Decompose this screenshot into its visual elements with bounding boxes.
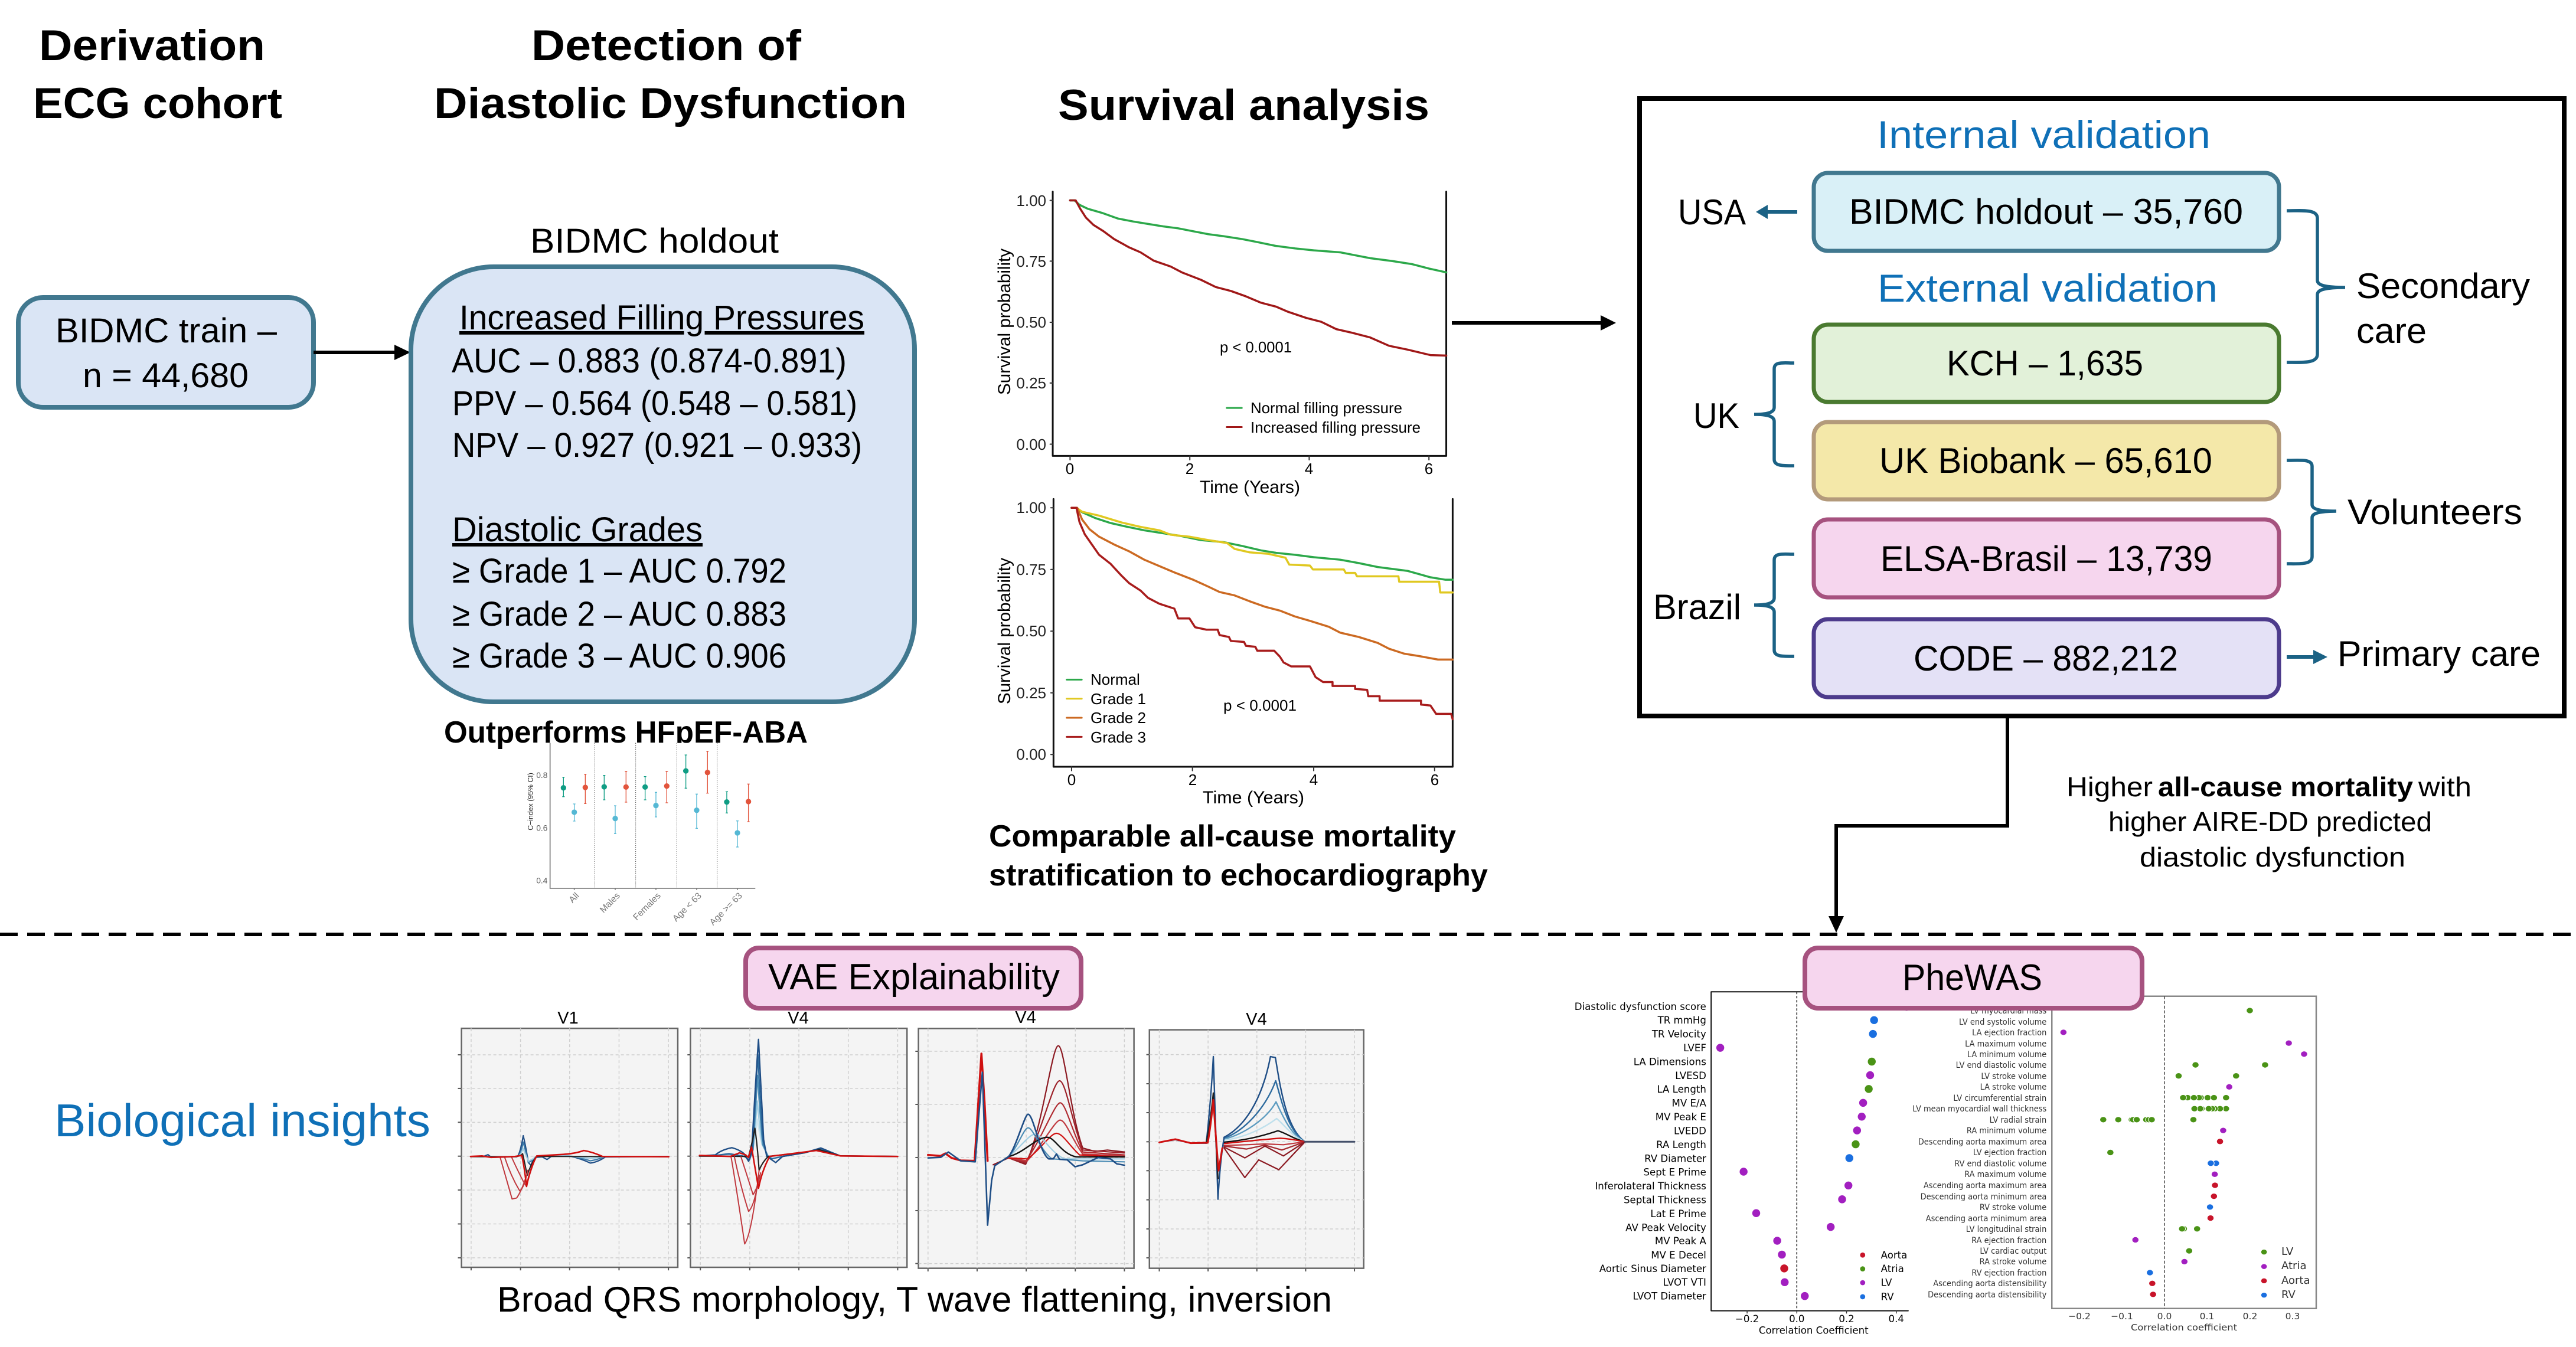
label: Secondary care with brace: care (2356, 311, 2427, 351)
label: USA with arrow: USA (1678, 192, 1746, 232)
subheading: Increased Filling Pressures: Increased Filling Pressures (459, 299, 864, 337)
caption: Outperforms HFpEF-ABA: Outperforms HFpEF-ABA (444, 715, 808, 750)
box: BIDMC train: BIDMC train – (55, 312, 277, 350)
chart: echo PheWAS: LVEDD (1674, 1125, 1706, 1136)
chart: survival by filling pressure: 0.50 (1016, 313, 1046, 331)
chart: echo PheWAS: RV (1881, 1291, 1894, 1302)
chart: survival by filling pressure: 1.00 (1016, 192, 1046, 210)
y labels: Descending aorta minimum area (1921, 1192, 2046, 1202)
chart: C-index comparison (525, 743, 762, 932)
chart: echo PheWAS: 0.0 (1789, 1313, 1805, 1325)
label: Secondary care with brace (2287, 211, 2530, 362)
y labels: LV mean myocardial wall thickness (1912, 1104, 2046, 1114)
chart: survival by filling pressure: Survival probability (995, 249, 1014, 395)
chart: CMR PheWAS: 0.2 (2243, 1311, 2257, 1322)
heading: Detection of Diastolic Dysfunction: Detection of (531, 22, 802, 70)
chart: ECG V4 T wave shift: V4 (1015, 1008, 1036, 1027)
chart: C-index comparison: 0.6 (536, 823, 547, 832)
label: Brazil with brace (1653, 554, 1794, 656)
y labels: LV circumferential strain (1953, 1093, 2046, 1103)
caption: comparable mortality stratification (989, 819, 1488, 892)
caption: comparable mortality stratification: Comparable all-cause mortality (989, 819, 1456, 854)
y labels: LV end diastolic volume (1956, 1060, 2046, 1070)
y labels: LV ejection fraction (1973, 1147, 2046, 1158)
chart: survival by filling pressure: Increased filling pressure (1251, 419, 1421, 436)
label: Volunteers with brace (2287, 460, 2522, 564)
chart: survival by diastolic grade: 6 (1431, 771, 1439, 789)
heading: Derivation ECG cohort: ECG cohort (33, 80, 282, 127)
heading: Detection of Diastolic Dysfunction (434, 22, 907, 127)
chart: echo PheWAS: Correlation Coefficient (1759, 1325, 1869, 1336)
chart: survival by filling pressure: 0.75 (1016, 253, 1046, 270)
chart: ECG V4 T wave shift (915, 1008, 1134, 1271)
chart: survival by diastolic grade: Grade 1 (1091, 690, 1146, 708)
arrow: survival to validation (1452, 315, 1616, 331)
chart: C-index comparison: Females (631, 891, 663, 923)
chart: ECG V4 T wave inversion (1147, 1010, 1364, 1271)
box: ELSA-Brasil: ELSA-Brasil – 13,739 (1880, 539, 2212, 578)
heading: Derivation ECG cohort (33, 22, 282, 127)
label: Volunteers with brace: Volunteers (2348, 492, 2522, 532)
chart: C-index comparison: Age >= 63 (708, 891, 745, 927)
chart: echo PheWAS: Septal Thickness (1624, 1195, 1706, 1206)
chart: survival by diastolic grade: Time (Years) (1203, 788, 1304, 807)
box: VAE Explainability (746, 948, 1081, 1008)
chart: C-index comparison: Males (598, 891, 622, 915)
metric: PPV: PPV – 0.564 (0.548 – 0.581) (452, 384, 857, 423)
chart: echo PheWAS: MV Peak A (1655, 1235, 1707, 1247)
chart: echo PheWAS: Sept E Prime (1644, 1167, 1706, 1178)
chart: ECG V1: V1 (557, 1009, 579, 1028)
chart: echo PheWAS: 0.4 (1889, 1313, 1904, 1325)
chart: survival by filling pressure: 0.00 (1016, 436, 1046, 453)
caption: comparable mortality stratification: stratification to echocardiography (989, 858, 1488, 892)
box: BIDMC holdout: BIDMC holdout – 35,760 (1849, 192, 2243, 231)
chart: CMR PheWAS (1911, 995, 2324, 1338)
subheading: Diastolic Grades: Diastolic Grades (452, 511, 703, 549)
y labels: Ascending aorta distensibility (1933, 1279, 2046, 1289)
chart: survival by diastolic grade: Grade 2 (1091, 709, 1146, 727)
metric: grade 2: ≥ Grade 2 – AUC 0.883 (452, 595, 786, 633)
y labels: LA ejection fraction (1972, 1028, 2046, 1038)
metric: grade 3: ≥ Grade 3 – AUC 0.906 (452, 637, 786, 675)
box: BIDMC train (18, 297, 314, 407)
chart: C-index comparison: C−index (95% CI) (527, 773, 535, 831)
chart: echo PheWAS: LA Dimensions (1634, 1056, 1706, 1067)
heading: External validation: External validation (1878, 266, 2218, 310)
box: PheWAS: PheWAS (1902, 957, 2042, 998)
chart: ECG V1 (458, 1009, 678, 1270)
chart: survival by diastolic grade: p < 0.0001 (1223, 697, 1297, 714)
heading: Detection of Diastolic Dysfunction: Diastolic Dysfunction (434, 80, 907, 127)
y labels: Ascending aorta minimum area (1926, 1214, 2046, 1224)
chart: echo PheWAS: TR Velocity (1651, 1029, 1706, 1040)
y labels: Descending aorta distensibility (1928, 1290, 2046, 1300)
chart: echo PheWAS: Atria (1881, 1263, 1904, 1274)
box: BIDMC holdout (1814, 173, 2279, 251)
chart: survival by filling pressure (995, 192, 1447, 497)
panel: BIDMC holdout metrics (411, 267, 915, 702)
y labels: LV end systolic volume (1959, 1017, 2046, 1027)
y labels: Descending aorta maximum area (1918, 1137, 2046, 1147)
y labels: RA minimum volume (1967, 1126, 2046, 1136)
chart: C-index comparison: 0.4 (536, 877, 548, 885)
chart: ECG V4 T wave inversion: V4 (1246, 1010, 1267, 1029)
chart: survival by filling pressure: 0.25 (1016, 374, 1046, 392)
y labels: RV ejection fraction (1971, 1268, 2046, 1278)
heading: Survival analysis: Survival analysis (1058, 81, 1429, 129)
y labels: RA ejection fraction (1971, 1235, 2046, 1245)
box: ELSA-Brasil (1814, 519, 2279, 597)
box: UK Biobank: UK Biobank – 65,610 (1879, 441, 2212, 480)
chart: echo PheWAS: −0.2 (1735, 1313, 1759, 1325)
chart: CMR PheWAS: 0.0 (2157, 1311, 2172, 1322)
chart: survival by diastolic grade: Survival probability (995, 558, 1014, 704)
chart: survival by diastolic grade: 0.50 (1016, 622, 1046, 640)
chart: survival by diastolic grade: Grade 3 (1091, 728, 1146, 746)
y labels: LA maximum volume (1965, 1039, 2046, 1049)
chart: CMR PheWAS: −0.2 (2068, 1311, 2091, 1322)
y labels: LA minimum volume (1967, 1050, 2046, 1060)
chart: C-index comparison: All (567, 891, 581, 905)
label: Biological insights: Biological insights (54, 1094, 430, 1146)
y labels: LV longitudinal strain (1966, 1224, 2046, 1234)
chart: survival by diastolic grade: Normal (1091, 671, 1140, 688)
chart: echo PheWAS: LVOT VTI (1663, 1277, 1706, 1288)
label: USA with arrow (1678, 192, 1797, 232)
chart: echo PheWAS: LVEF (1683, 1042, 1706, 1054)
y labels: Ascending aorta maximum area (1924, 1181, 2046, 1191)
y labels: RV end diastolic volume (1954, 1159, 2046, 1169)
heading: Derivation ECG cohort: Derivation (39, 22, 265, 70)
chart: echo PheWAS: MV Peak E (1656, 1111, 1706, 1123)
chart: echo PheWAS: RV Diameter (1644, 1153, 1706, 1164)
box: UK Biobank (1814, 422, 2279, 499)
y labels: LV radial strain (1990, 1115, 2046, 1125)
arrow: validation to PheWAS (1829, 717, 2007, 933)
metric: NPV: NPV – 0.927 (0.921 – 0.933) (452, 426, 862, 465)
label: BIDMC holdout: BIDMC holdout (530, 222, 779, 260)
box: PheWAS (1805, 948, 2142, 1008)
chart: echo PheWAS: LA Length (1657, 1084, 1706, 1095)
chart: C-index comparison: 0.8 (536, 771, 547, 780)
y labels: LV cardiac output (1980, 1246, 2047, 1256)
chart: echo PheWAS: LVESD (1675, 1070, 1706, 1081)
box: BIDMC train: n = 44,680 (83, 357, 249, 395)
y labels: RA stroke volume (1980, 1257, 2046, 1267)
chart: ECG V4 QRS (687, 1009, 907, 1270)
text: higher all-cause mortality: Higher (2066, 771, 2153, 802)
y labels: RA maximum volume (1964, 1169, 2046, 1179)
text: higher all-cause mortality: higher AIRE-DD predicted (2108, 806, 2432, 837)
chart: echo PheWAS: AV Peak Velocity (1625, 1222, 1706, 1233)
chart: CMR PheWAS: 0.3 (2286, 1311, 2300, 1322)
caption: broad QRS morphology: Broad QRS morphology, T wave flattening, inversion (497, 1280, 1332, 1319)
y labels: RV stroke volume (1980, 1202, 2046, 1212)
chart: echo PheWAS: Lat E Prime (1650, 1208, 1706, 1220)
chart: C-index comparison: Age < 63 (671, 891, 704, 924)
box: KCH (1814, 325, 2279, 402)
chart: survival by filling pressure: Time (Years) (1200, 478, 1300, 497)
box: VAE Explainability: VAE Explainability (768, 957, 1060, 998)
box: CODE (1814, 619, 2279, 697)
chart: survival by filling pressure: 0 (1066, 460, 1074, 478)
label: Primary care with arrow: Primary care (2337, 634, 2541, 674)
chart: survival by diastolic grade: 1.00 (1016, 499, 1046, 516)
chart: echo PheWAS: TR mmHg (1657, 1015, 1706, 1026)
box: KCH: KCH – 1,635 (1947, 344, 2143, 383)
chart: survival by diastolic grade: 0.00 (1016, 746, 1046, 763)
chart: echo PheWAS (1575, 992, 1911, 1336)
y labels: LV myocardial mass (1970, 1006, 2046, 1016)
chart: survival by diastolic grade: 0.75 (1016, 561, 1046, 578)
metric: AUC: AUC – 0.883 (0.874-0.891) (452, 342, 847, 380)
heading: Internal validation: Internal validation (1877, 113, 2211, 156)
chart: survival by filling pressure: p < 0.0001 (1220, 338, 1292, 356)
label: Secondary care with brace: Secondary (2356, 266, 2530, 306)
chart: CMR PheWAS: Aorta (2281, 1274, 2310, 1287)
panel: validation cohorts (1640, 99, 2564, 716)
chart: echo PheWAS: Aorta (1881, 1250, 1907, 1261)
chart: echo PheWAS: Diastolic dysfunction score (1575, 1001, 1706, 1012)
chart: CMR PheWAS: LV (2281, 1245, 2294, 1258)
chart: echo PheWAS: MV E/A (1672, 1098, 1707, 1109)
chart: echo PheWAS: LV (1881, 1277, 1892, 1289)
chart: CMR PheWAS: −0.1 (2111, 1311, 2133, 1322)
label: Brazil with brace: Brazil (1653, 587, 1741, 627)
chart: echo PheWAS: MV E Decel (1651, 1250, 1706, 1261)
chart: survival by diastolic grade: 0 (1067, 771, 1076, 789)
chart: survival by diastolic grade: 2 (1189, 771, 1197, 789)
chart: ECG V4 QRS: V4 (788, 1009, 809, 1028)
chart: survival by filling pressure: 2 (1186, 460, 1194, 478)
text: higher all-cause mortality (2066, 771, 2471, 872)
chart: survival by filling pressure: 4 (1305, 460, 1313, 478)
y labels (1912, 1006, 2047, 1300)
chart: CMR PheWAS: Correlation coefficient (2131, 1322, 2237, 1333)
chart: CMR PheWAS: RV (2281, 1289, 2296, 1301)
text: higher all-cause mortality: diastolic dysfunction (2140, 842, 2405, 872)
label: UK with brace: UK (1693, 396, 1739, 436)
chart: survival by diastolic grade (995, 499, 1452, 807)
chart: survival by filling pressure: Normal filling pressure (1251, 399, 1402, 417)
chart: CMR PheWAS: 0.1 (2200, 1311, 2214, 1322)
chart: survival by diastolic grade: 4 (1310, 771, 1318, 789)
chart: survival by filling pressure: 6 (1425, 460, 1433, 478)
chart: echo PheWAS: 0.2 (1839, 1313, 1855, 1325)
y labels: LA stroke volume (1980, 1082, 2046, 1092)
chart: echo PheWAS: Aortic Sinus Diameter (1599, 1263, 1706, 1274)
y labels: LV stroke volume (1981, 1071, 2046, 1081)
chart: survival by diastolic grade: 0.25 (1016, 684, 1046, 702)
chart: echo PheWAS: Inferolateral Thickness (1595, 1181, 1706, 1192)
chart: echo PheWAS: RA Length (1656, 1139, 1706, 1150)
chart: echo PheWAS: LVOT Diameter (1633, 1291, 1706, 1302)
text: higher all-cause mortality: with (2418, 771, 2471, 802)
box: CODE: CODE – 882,212 (1914, 639, 2178, 678)
metric: grade 1: ≥ Grade 1 – AUC 0.792 (452, 552, 786, 590)
arrow: train to holdout (314, 345, 410, 360)
chart: CMR PheWAS: Atria (2281, 1260, 2306, 1272)
label: UK with brace (1693, 363, 1794, 466)
text: higher all-cause mortality: all-cause mortality (2158, 771, 2413, 802)
